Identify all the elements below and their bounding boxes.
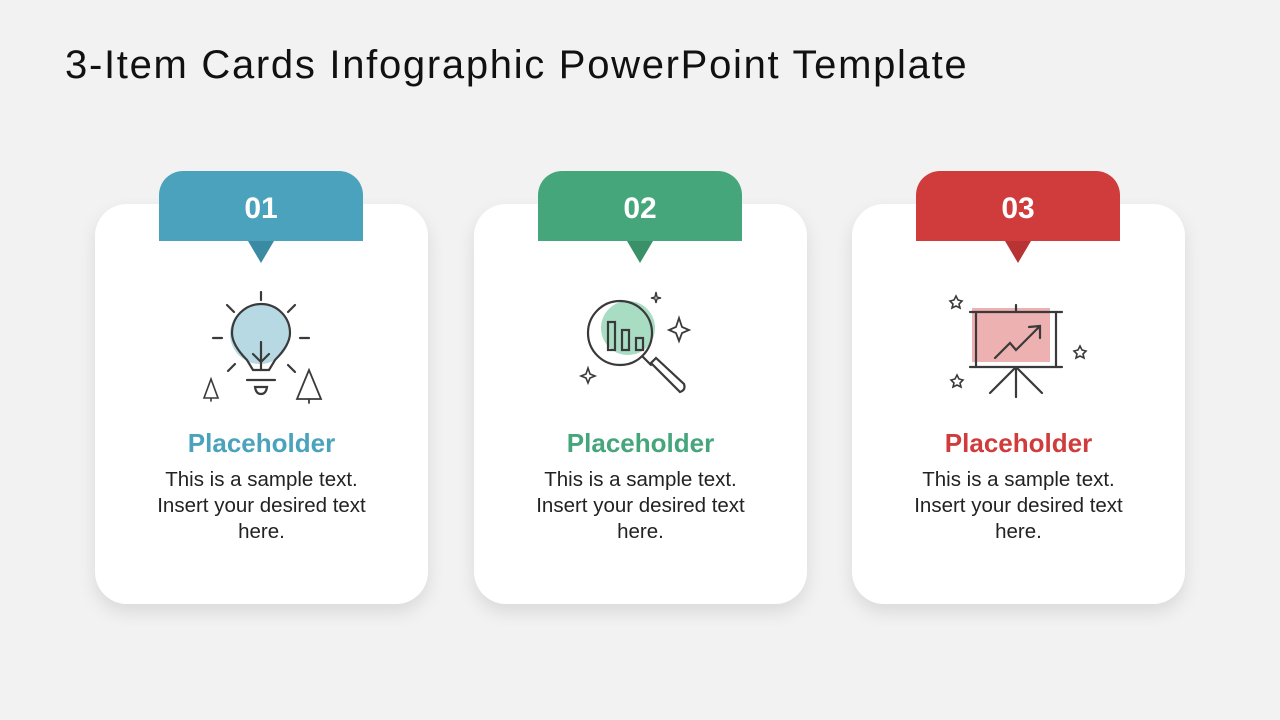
- card 3: [852, 204, 1185, 604]
- text 3: Insert your desired text: [914, 494, 1123, 517]
- text 2: [536, 468, 745, 543]
- tab 03: 03: [1001, 192, 1035, 225]
- card 2: [474, 204, 807, 604]
- heading 1: Placeholder: [188, 428, 335, 458]
- text 1: Insert your desired text: [157, 494, 366, 517]
- heading 3: Placeholder: [945, 428, 1092, 458]
- text 1: This is a sample text.: [165, 468, 358, 491]
- icon: light bulb: [204, 292, 321, 403]
- tab 01: 01: [244, 192, 278, 225]
- card 1: [95, 204, 428, 604]
- tab 01: [159, 171, 363, 241]
- tab 03: [916, 171, 1120, 241]
- text 1: here.: [238, 520, 285, 543]
- text 3: here.: [995, 520, 1042, 543]
- icon: presentation chart: [950, 296, 1086, 397]
- text 2: This is a sample text.: [544, 468, 737, 491]
- text 2: Insert your desired text: [536, 494, 745, 517]
- text 1: [157, 468, 366, 543]
- title: 3-Item Cards Infographic PowerPoint Template: [65, 43, 968, 87]
- tab 02: 02: [623, 192, 657, 225]
- heading 2: Placeholder: [567, 428, 714, 458]
- text 3: This is a sample text.: [922, 468, 1115, 491]
- text 3: [914, 468, 1123, 543]
- tab 02: [538, 171, 742, 241]
- text 2: here.: [617, 520, 664, 543]
- icon: magnifier: [581, 292, 689, 392]
